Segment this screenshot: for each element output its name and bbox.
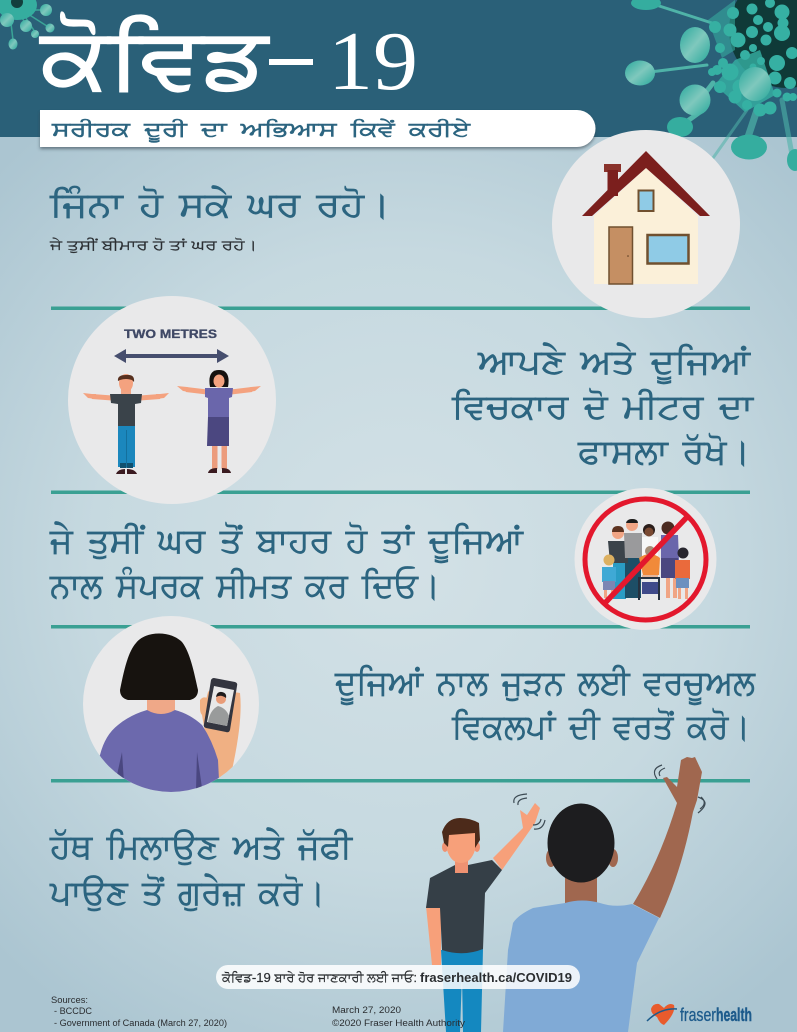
- figure: woman: [177, 370, 261, 473]
- heading: stay home: ਜਿੰਨਾ ਹੋ ਸਕੇ ਘਰ ਰਹੋ।: [49, 186, 390, 224]
- date and copyright: [332, 1005, 466, 1028]
- panel: two metres: [68, 296, 754, 504]
- more information pill: ਕੋਵਿਡ-19 ਬਾਰੇ ਹੋਰ ਜਾਣਕਾਰੀ ਲਈ ਜਾਓ:: [221, 970, 417, 985]
- heading: avoid handshakes: [49, 828, 353, 912]
- sources: Sources:: [51, 995, 88, 1005]
- subtitle pill: [40, 110, 596, 147]
- title: 19: [328, 15, 418, 108]
- wave marks: [514, 794, 545, 829]
- divider lines: [51, 306, 750, 782]
- heading: avoid handshakes: ਹੱਥ ਮਿਲਾਉਣ ਅਤੇ ਜੱਫੀ: [49, 828, 353, 866]
- virus illustration: top right: [625, 0, 797, 171]
- neck: [147, 700, 175, 714]
- heading: virtual options: ਦੂਜਿਆਂ ਨਾਲ ਜੁੜਨ ਲਈ ਵਰਚੂਅਲ: [334, 664, 756, 705]
- figure: person from behind waving: [503, 757, 705, 1032]
- arm and hand: [202, 690, 241, 781]
- figure: man: [83, 374, 169, 474]
- heading: limit contact: ਨਾਲ ਸੰਪਰਕ ਸੀਮਤ ਕਰ ਦਿਓ।: [49, 566, 440, 605]
- figures: group of people: [602, 519, 690, 600]
- arrow: two-way distance: [114, 349, 229, 363]
- heading: limit contact: [49, 522, 524, 605]
- icon: house: [552, 130, 740, 318]
- hair: [120, 633, 198, 700]
- heading: avoid handshakes: ਪਾਉਣ ਤੋਂ ਗੁਰੇਜ਼ ਕਰੋ।: [49, 874, 325, 912]
- wave marks: [654, 765, 705, 813]
- virus illustration: top left: [0, 0, 54, 50]
- icon: two metres circle: [68, 296, 276, 504]
- heading: keep two metres apart: ਵਿਚਕਾਰ ਦੋ ਮੀਟਰ ਦਾ: [451, 388, 754, 426]
- sources: [51, 995, 227, 1028]
- title: ਕੋਵਿਡ: [40, 11, 270, 105]
- heading: virtual options: [334, 664, 756, 746]
- heading: keep two metres apart: ਆਪਣੇ ਅਤੇ ਦੂਜਿਆਂ: [477, 343, 751, 384]
- title: [40, 11, 418, 108]
- icon: phone: [204, 678, 237, 732]
- logo: fraserhealth: [647, 1004, 752, 1025]
- heading: keep two metres apart: [451, 343, 754, 471]
- heading: keep two metres apart: ਫਾਸਲਾ ਰੱਖੋ।: [577, 433, 750, 471]
- more information pill: [216, 965, 580, 989]
- text: stay home if sick: ਜੇ ਤੁਸੀਂ ਬੀਮਾਰ ਹੋ ਤਾਂ ਘਰ ਰਹੋ।: [49, 237, 257, 254]
- heading: virtual options: ਵਿਕਲਪਾਂ ਦੀ ਵਰਤੋਂ ਕਰੋ।: [451, 708, 750, 746]
- heading: limit contact: ਜੇ ਤੁਸੀਂ ਘਰ ਤੋਂ ਬਾਹਰ ਹੋ ਤਾਂ ਦੂਜਿਆਂ: [49, 522, 524, 563]
- subtitle pill: ਸਰੀਰਕ ਦੂਰੀ ਦਾ ਅਭਿਆਸ ਕਿਵੇਂ ਕਰੀਏ: [51, 118, 471, 143]
- date and copyright: ©2020 Fraser Health Authority: [332, 1018, 466, 1028]
- figure: waving man: [426, 794, 545, 1032]
- panel: stay home: [49, 130, 740, 318]
- panel: virtual options: [83, 616, 756, 800]
- more information pill: fraserhealth.ca/COVID19: [420, 971, 572, 985]
- sources: - Government of Canada (March 27, 2020): [54, 1018, 227, 1028]
- sweater: [100, 710, 219, 792]
- header band: [0, 0, 797, 137]
- icon: video call: [83, 616, 259, 800]
- date and copyright: March 27, 2020: [332, 1005, 401, 1015]
- logo: fraserhealth: health: [716, 1005, 752, 1025]
- sources: - BCCDC: [54, 1006, 93, 1016]
- panel: limit contact: [49, 488, 716, 630]
- icon: prohibition sign: [585, 499, 706, 620]
- panel: avoid handshakes: [49, 757, 705, 1032]
- logo: fraserhealth: fraser: [680, 1005, 716, 1025]
- label: two metres: TWO METRES: [124, 329, 217, 341]
- icon: no groups: [574, 488, 716, 630]
